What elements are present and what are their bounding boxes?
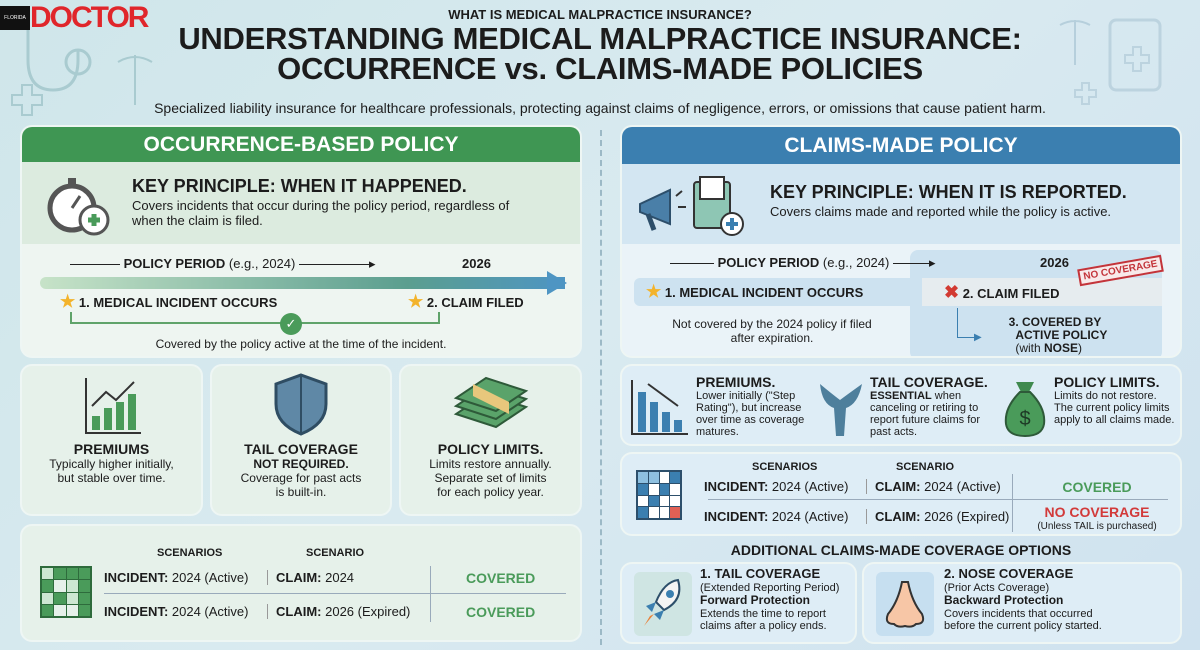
key principle <box>622 164 1180 244</box>
logo: DOCTOR <box>30 1 147 34</box>
card: tail option <box>620 562 857 644</box>
title block: OCCURRENCE vs. CLAIMS-MADE POLICIES <box>277 51 923 86</box>
timeline <box>634 250 1164 356</box>
scenarios: occurrence: INCIDENT: 2024 (Active) <box>104 604 248 619</box>
card: premiums: Typically higher initially, <box>49 457 174 471</box>
card: nose option: Backward Protection <box>944 593 1063 607</box>
icon: grid <box>40 566 92 618</box>
card: premiums: PREMIUMS <box>74 441 149 457</box>
card: tail option: (Extended Reporting Period) <box>700 582 839 594</box>
card: premiums: but stable over time. <box>57 471 166 485</box>
row: claims-made features <box>620 364 1182 446</box>
card: policy limits <box>399 364 582 516</box>
scenarios: claims-made: SCENARIO <box>896 461 954 473</box>
card: nose option <box>862 562 1182 644</box>
card: tail option: Extends the time to report claims after a policy ends. <box>700 608 827 632</box>
card: tail option: 1. TAIL COVERAGE <box>700 566 820 581</box>
timeline: POLICY PERIOD (e.g., 2024) ▸ <box>718 255 936 270</box>
timeline: 2026 <box>1040 255 1069 270</box>
card: nose option: Covers incidents that occurred <box>944 608 1093 620</box>
stamp: no coverage: NO COVERAGE <box>1083 259 1158 282</box>
scenarios: claims-made: INCIDENT: 2024 (Active) <box>704 479 848 494</box>
icon: rocket <box>634 572 692 636</box>
background decorations <box>11 18 1162 116</box>
card: premiums <box>20 364 203 516</box>
row: claims-made features: Lower initially ("Step Rating"), but increase over time as coverage matures. <box>696 390 804 438</box>
row: claims-made features: TAIL COVERAGE. <box>870 374 988 390</box>
scenarios: occurrence: SCENARIOS <box>157 547 222 559</box>
divider <box>600 130 602 645</box>
icon: megaphone and folder <box>639 176 744 236</box>
arrow bar <box>40 277 565 289</box>
scenarios: claims-made: NO COVERAGE <box>1044 504 1150 520</box>
header: CLAIMS-MADE POLICY <box>784 134 1018 157</box>
timeline: (with NOSE) <box>1015 341 1082 355</box>
timeline: Not covered by the 2024 policy if filed after expiration. <box>672 317 872 345</box>
icon: descending bars <box>631 380 688 435</box>
timeline: ACTIVE POLICY <box>1015 328 1107 342</box>
key principle: Covers incidents that occur during the policy period, regardless of when the claim is filed. <box>132 198 509 228</box>
card: tail coverage: NOT REQUIRED. <box>253 457 349 471</box>
timeline <box>40 256 567 351</box>
title block <box>178 7 1022 86</box>
scenarios: claims-made: SCENARIOS <box>752 461 817 473</box>
logo: FLORIDA <box>4 15 26 21</box>
scenarios: claims-made <box>620 452 1182 536</box>
timeline: ★ 1. MEDICAL INCIDENT OCCURS <box>60 292 277 311</box>
scenarios: claims-made: INCIDENT: 2024 (Active) <box>704 509 848 524</box>
card: tail coverage: TAIL COVERAGE <box>244 441 358 457</box>
key principle: KEY PRINCIPLE: WHEN IT IS REPORTED. <box>770 182 1127 202</box>
header <box>22 127 580 162</box>
timeline: ✓ <box>286 316 296 331</box>
icon: stopwatch <box>48 178 110 236</box>
row: claims-made features: ESSENTIAL when canceling or retiring to report future claims for past acts. <box>870 390 980 438</box>
title block: WHAT IS MEDICAL MALPRACTICE INSURANCE? <box>448 7 752 22</box>
panel: claims-made <box>620 125 1182 358</box>
card: nose option: (Prior Acts Coverage) <box>944 582 1049 594</box>
card: policy limits: POLICY LIMITS. <box>438 441 543 457</box>
card: policy limits: for each policy year. <box>437 485 544 499</box>
timeline: Covered by the policy active at the time of the incident. <box>156 337 446 351</box>
icon: grid <box>636 470 682 520</box>
scenarios: occurrence: COVERED <box>466 570 535 586</box>
header: OCCURRENCE-BASED POLICY <box>143 133 459 156</box>
title block: UNDERSTANDING MEDICAL MALPRACTICE INSURANCE: <box>178 21 1022 56</box>
timeline: ★ 1. MEDICAL INCIDENT OCCURS <box>646 282 863 301</box>
scenarios: occurrence: INCIDENT: 2024 (Active) <box>104 570 248 585</box>
heading: additional options: ADDITIONAL CLAIMS-MADE COVERAGE OPTIONS <box>731 542 1071 558</box>
card: policy limits: Limits restore annually. <box>429 457 552 471</box>
timeline: 3. COVERED BY <box>1009 315 1101 329</box>
scenarios: claims-made: CLAIM: 2024 (Active) <box>875 479 1001 494</box>
key principle <box>22 162 580 244</box>
scenarios: claims-made: (Unless TAIL is purchased) <box>1037 521 1157 532</box>
scenarios: claims-made: CLAIM: 2026 (Expired) <box>875 509 1009 524</box>
scenarios: occurrence: CLAIM: 2026 (Expired) <box>276 604 410 619</box>
timeline: ▶ <box>974 332 982 343</box>
timeline: 2026 <box>462 256 491 271</box>
icon: money bag <box>1004 382 1046 437</box>
scenarios: occurrence <box>20 524 582 642</box>
card: tail coverage: is built-in. <box>276 485 326 499</box>
row: claims-made features: PREMIUMS. <box>696 374 775 390</box>
icon: nose <box>876 572 934 636</box>
scenarios: claims-made: COVERED <box>1062 479 1132 495</box>
header <box>622 127 1180 164</box>
scenarios: occurrence: COVERED <box>466 604 535 620</box>
scenarios: occurrence: CLAIM: 2024 <box>276 570 354 585</box>
card: tail coverage <box>210 364 392 516</box>
card: nose option: 2. NOSE COVERAGE <box>944 566 1073 581</box>
card: nose option: before the current policy started. <box>944 620 1102 632</box>
timeline: POLICY PERIOD (e.g., 2024) ▸ <box>124 256 376 271</box>
row: claims-made features: Limits do not restore. The current policy limits apply to all claims made. <box>1054 390 1174 426</box>
icon: whale tail <box>820 384 862 436</box>
timeline: ★ 2. CLAIM FILED <box>408 292 524 311</box>
icon: money bag: $ <box>1019 408 1031 430</box>
stamp: no coverage <box>1077 255 1164 286</box>
description: Specialized liability insurance for healthcare professionals, protecting against claims of negligence, errors, or omissions that cause patient harm. <box>154 100 1046 116</box>
card: tail coverage: Coverage for past acts <box>241 471 361 485</box>
scenarios: occurrence: SCENARIO <box>306 547 364 559</box>
key principle: Covers claims made and reported while the policy is active. <box>770 204 1111 219</box>
timeline: ✖ 2. CLAIM FILED <box>944 282 1059 302</box>
panel: occurrence <box>20 125 582 358</box>
key principle: KEY PRINCIPLE: WHEN IT HAPPENED. <box>132 176 467 196</box>
card: policy limits: Separate set of limits <box>434 471 547 485</box>
row: claims-made features: POLICY LIMITS. <box>1054 374 1160 390</box>
card: tail option: Forward Protection <box>700 593 810 607</box>
